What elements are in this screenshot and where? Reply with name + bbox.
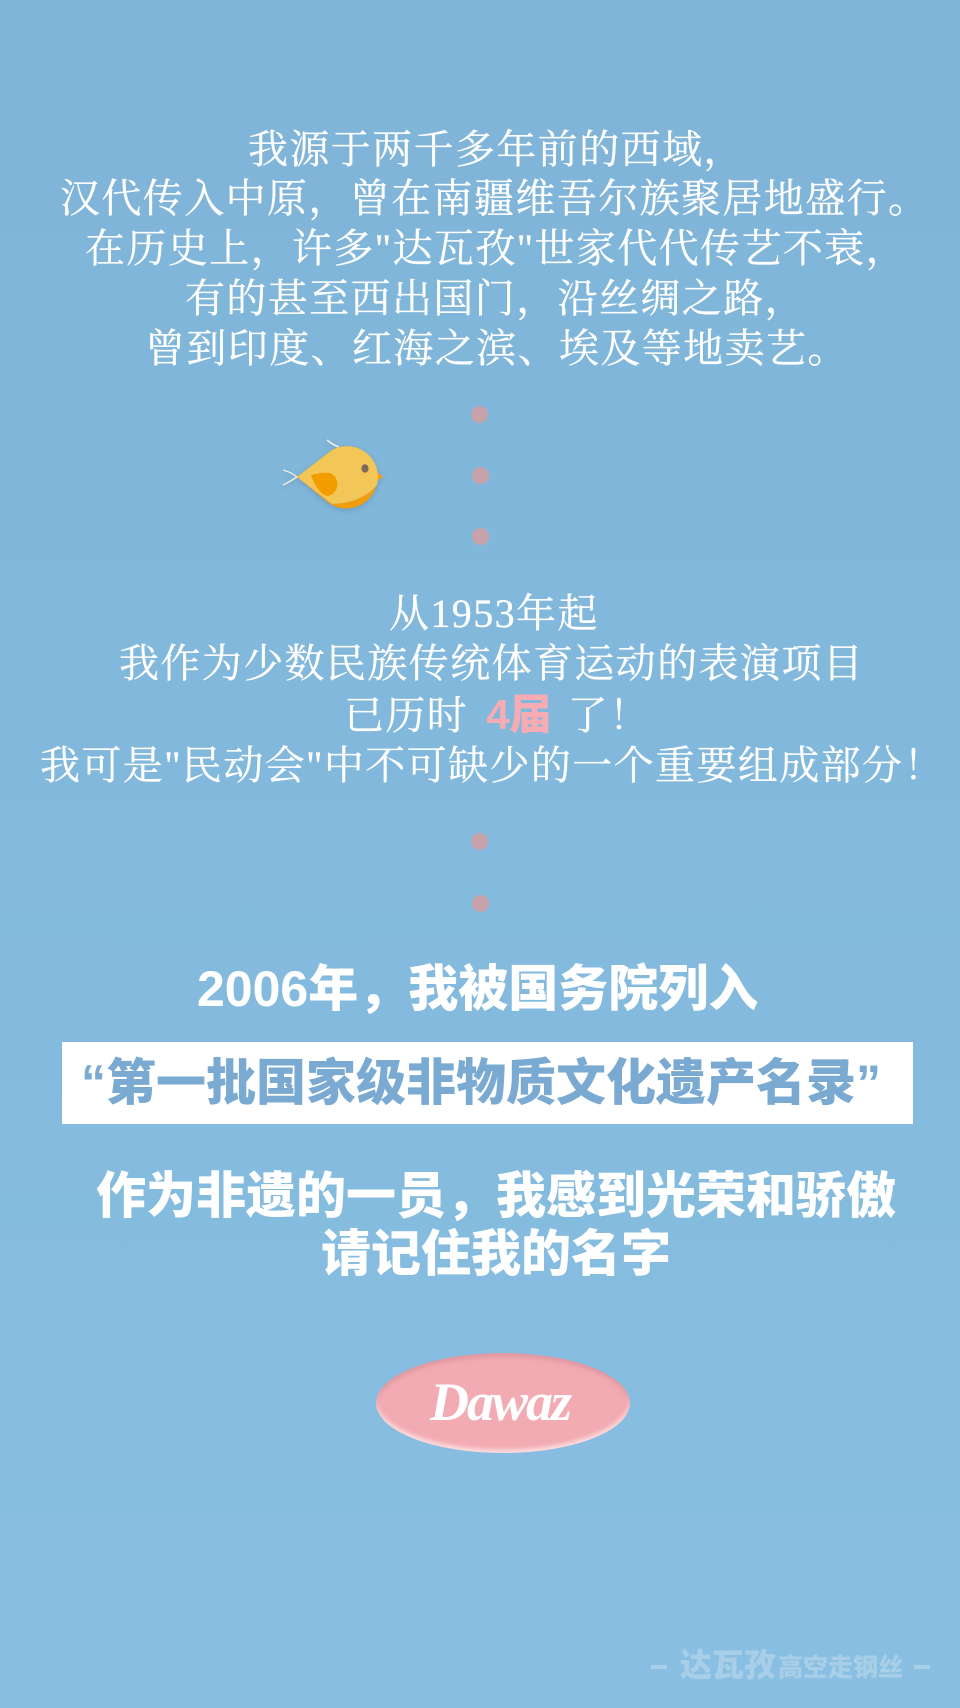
footer subtitle: 高空走钢丝 (778, 1654, 903, 1682)
right dash (914, 1665, 930, 1669)
footer caption (651, 1647, 930, 1683)
line 5: 曾到印度、红海之滨、埃及等地卖艺。 (145, 326, 849, 371)
line 1: 从1953年起 (389, 591, 599, 636)
banner: national list (62, 1042, 913, 1124)
line 2: 我作为少数民族传统体育运动的表演项目 (119, 641, 864, 686)
text block: pride statement (96, 1168, 896, 1282)
left dash (651, 1665, 667, 1669)
line 3 with highlight: 已历时 4届 了！ (344, 691, 650, 738)
line 2: 汉代传入中原，曾在南疆维吾尔族聚居地盛行。 (60, 176, 929, 221)
dotted divider: upper (471, 406, 489, 545)
line 1: 作为非遗的一员，我感到光荣和骄傲 (96, 1168, 896, 1224)
banner text: “第一批国家级非物质文化遗产名录” (81, 1055, 881, 1111)
dotted divider: lower (471, 833, 489, 912)
footer name: 达瓦孜 (680, 1647, 776, 1683)
icon: yellow bird (282, 440, 383, 512)
line 2: 请记住我的名字 (321, 1226, 671, 1282)
text block: history intro (60, 127, 929, 371)
script name: Dawaz (430, 1372, 570, 1432)
line 3: 在历史上，许多"达瓦孜"世家代代传艺不衰， (85, 226, 907, 271)
line 4: 有的甚至西出国门，沿丝绸之路， (185, 276, 806, 321)
line 1: 我源于两千多年前的西域， (248, 127, 745, 172)
name badge: Dawaz (376, 1353, 630, 1453)
text block: since 1953 (40, 591, 945, 788)
line 4: 我可是"民动会"中不可缺少的一个重要组成部分！ (40, 743, 945, 788)
heading: 2006 listing: 2006年，我被国务院列入 (197, 961, 758, 1017)
